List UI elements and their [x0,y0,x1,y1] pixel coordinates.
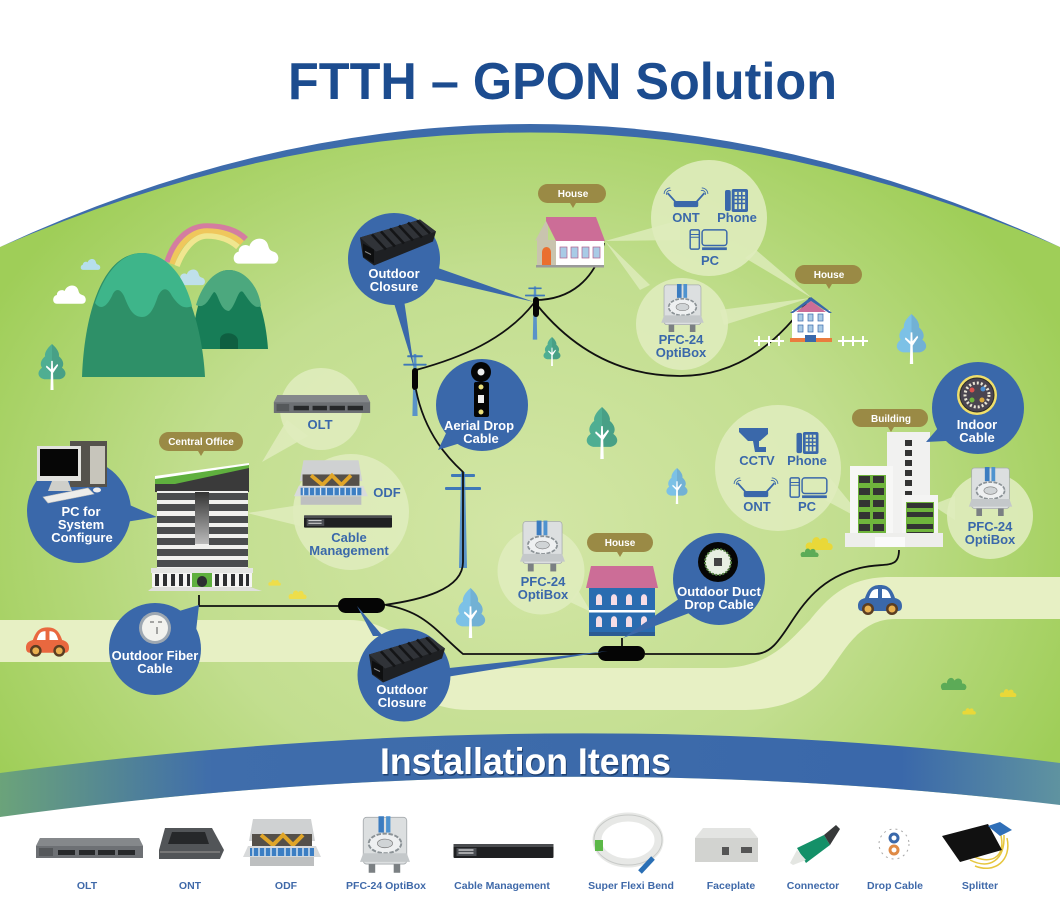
item: OLT: OLT [77,880,98,892]
label: cable management: Management [309,543,389,558]
item: cable management [454,844,554,892]
item: ONT [159,828,224,892]
label: Outdoor Fiber [112,648,198,663]
item: splitter [942,822,1012,892]
label: Outdoor [368,266,420,281]
house body [537,240,556,266]
green landscape [0,124,1060,800]
label: cable management: Cable [331,530,367,545]
item: faceplate [695,828,758,892]
trees [39,314,926,638]
poles [403,286,545,568]
label pill: House [605,538,636,549]
title: FTTH – GPON Solution [288,53,837,111]
item: drop cable [867,829,923,892]
installation items banner: Installation Items [381,742,672,784]
icon: PC [790,478,827,498]
speech bubble: OLT [262,368,370,462]
label: PFC-24 OptiBox building: PFC-24 [968,519,1013,534]
label pill: House [558,189,589,200]
blue bubble: indoor cable [926,362,1024,454]
label: PFC-24 OptiBox lower: OptiBox [518,587,569,602]
item: faceplate: Faceplate [707,880,755,892]
speech bubble: house devices [605,160,812,298]
item: drop cable: Drop Cable [867,880,923,892]
installation items banner [0,733,1060,817]
label pill: Building [871,414,911,425]
item: super flexi bend: Super Flexi Bend [588,880,674,892]
label: Cable [463,431,499,446]
label: Cable [137,661,173,676]
label: Configure [51,530,113,545]
speech bubble: building devices [715,405,866,531]
closure device [369,636,445,682]
closure device [360,220,436,266]
label: Outdoor [376,682,428,697]
blue bubble: outdoor fiber cable [109,603,201,695]
blue bubble: outdoor duct drop cable [623,533,765,638]
item: super flexi bend [588,815,674,892]
speech bubble: PFC-24 house [605,241,810,370]
label: Closure [370,279,418,294]
item: cable management: Cable Management [454,880,550,892]
cable cross-section [139,612,171,644]
ODF device [294,460,368,505]
blue bubble: outdoor closure bottom [357,606,608,722]
device labels: building: PC [798,499,817,514]
label pill [159,432,243,456]
mountains [82,253,268,377]
apartment building [845,409,943,547]
label pill: Central Office [168,437,234,448]
device labels: house [672,210,757,268]
icon: phone [725,189,748,212]
label: Outdoor Duct [677,584,762,599]
fiber cables [199,243,899,654]
item: ODF [243,819,321,892]
rainbow [167,226,246,266]
item: PFC-24 OptiBox [346,816,426,892]
speech bubble: PFC-24 building [932,467,1033,559]
item: PFC-24 OptiBox: PFC-24 OptiBox [346,880,426,892]
label: OLT: OLT [307,417,333,432]
label: Aerial Drop [444,418,514,433]
device labels: house: ONT [672,210,700,225]
item: connector: Connector [787,880,839,892]
installation items banner: Installation Items [380,741,671,782]
icon: PC [690,230,727,250]
blue bubble: PC for system configure [27,441,157,563]
bushes [268,537,1016,714]
blue bubble: outdoor closure top [348,213,534,368]
icon: phone [796,432,818,454]
device labels: building: Phone [787,453,827,468]
white lower area [0,777,1060,911]
icon: ONT [734,478,778,497]
label: Drop Cable [684,597,754,612]
clouds [53,239,278,304]
item: ODF: ODF [275,880,298,892]
OLT device [274,395,370,413]
speech bubble: PFC-24 lower house [498,521,591,614]
cable cross-section [957,375,997,415]
central office [148,432,262,591]
item: ONT: ONT [179,880,202,892]
label: PC for [62,504,100,519]
device labels: house: Phone [717,210,757,225]
cable closures [338,297,645,661]
blue bubble: aerial drop cable [436,359,528,451]
lower house [586,533,658,636]
label: Cable [959,430,995,445]
icon: ONT [664,188,708,207]
building body [155,464,249,492]
fences [754,336,868,346]
house body [586,566,658,588]
label: ODF: ODF [373,485,401,500]
item: OLT [36,838,143,892]
device labels: building: CCTV [739,453,775,468]
label: PFC-24 OptiBox lower: PFC-24 [521,574,566,589]
cable management device [304,515,392,528]
label: PFC-24 OptiBox building: OptiBox [965,532,1016,547]
label: PFC-24 OptiBox house: OptiBox [656,345,707,360]
OptiBox [520,521,565,571]
cable cross-section [471,362,491,417]
device labels: building [739,453,827,514]
speech bubble: ODF and cable management [247,454,409,570]
icon: computer [37,441,107,503]
towers [887,432,930,544]
device labels: house: PC [701,253,720,268]
house body [792,310,830,342]
item: splitter: Splitter [962,880,998,892]
OptiBox [661,284,704,332]
device labels: building: ONT [743,499,771,514]
label: Indoor [957,417,997,432]
label: PFC-24 OptiBox house: PFC-24 [659,332,704,347]
icon: CCTV [739,428,768,452]
cable cross-section [698,542,738,582]
label pill: House [814,270,845,281]
right house [754,265,868,346]
item: connector [787,825,840,892]
top house [535,184,606,268]
road [0,577,1060,710]
label: System [58,517,104,532]
label: Closure [378,695,426,710]
OptiBox [969,467,1012,516]
cars [26,585,902,657]
